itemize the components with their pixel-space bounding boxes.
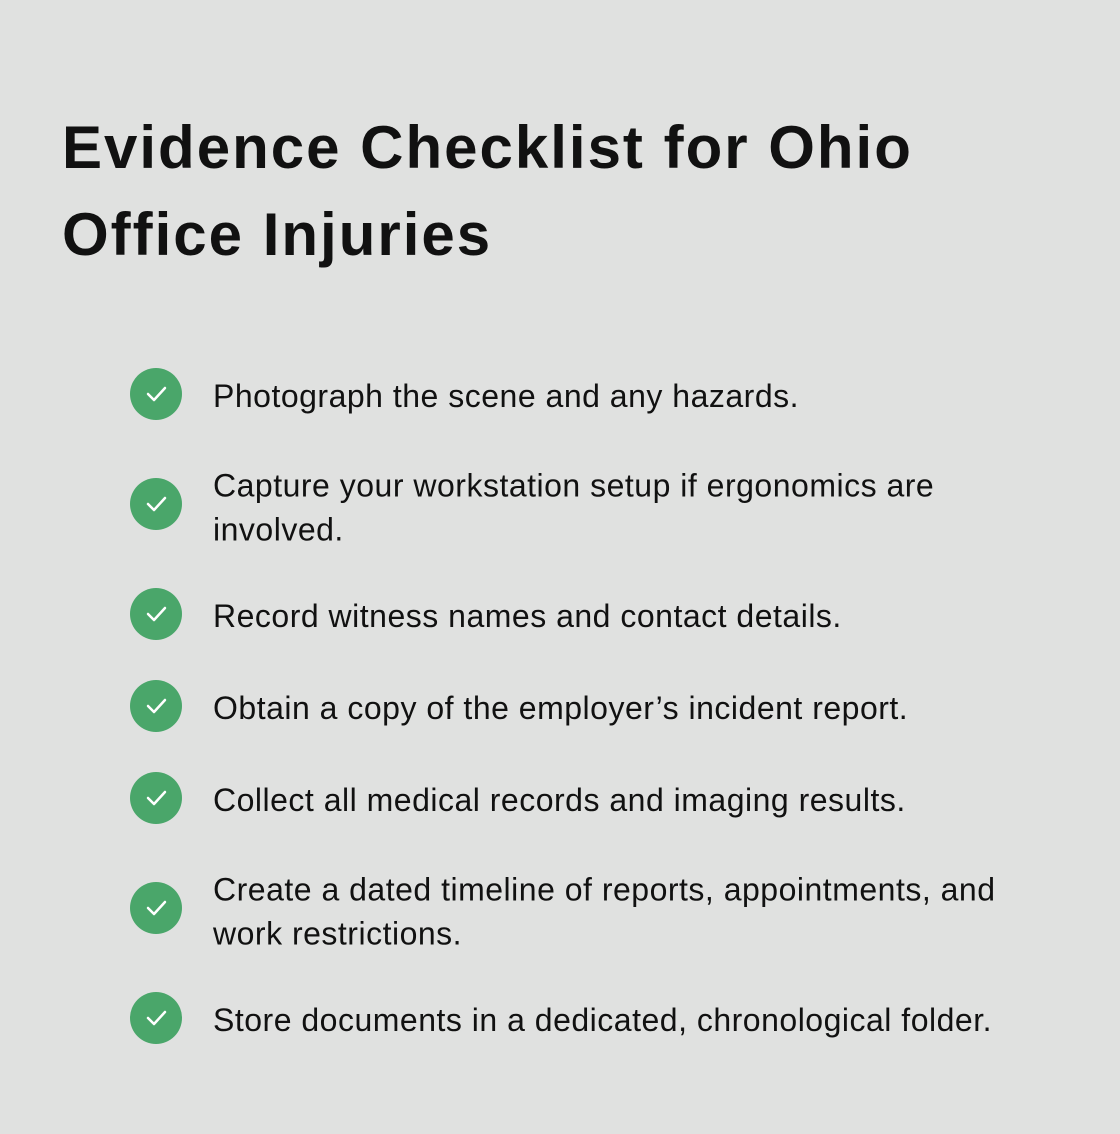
item 3	[130, 588, 842, 640]
item 6: Create a dated timeline of reports, appointments, and work restrictions.	[213, 872, 996, 952]
item 1	[130, 368, 799, 420]
title: Evidence Checklist for Ohio Office Injuries	[62, 114, 913, 268]
item 7	[130, 992, 992, 1044]
item 4	[130, 680, 908, 732]
item 3: Record witness names and contact details.	[213, 598, 842, 634]
item 5: Collect all medical records and imaging results.	[213, 782, 906, 818]
item 2: Capture your workstation setup if ergonomics are involved.	[213, 468, 934, 548]
item 1: Photograph the scene and any hazards.	[213, 378, 799, 414]
item 4: Obtain a copy of the employer’s incident report.	[213, 690, 908, 726]
item 7: Store documents in a dedicated, chronological folder.	[213, 1002, 992, 1038]
item 5	[130, 772, 906, 824]
